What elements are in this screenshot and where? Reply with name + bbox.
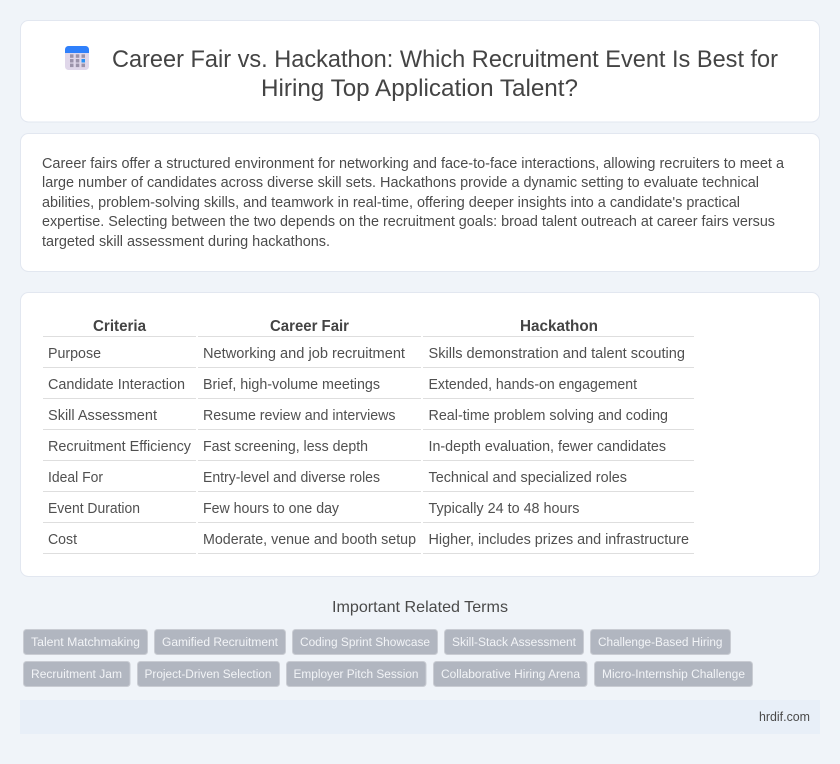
table row: Cost: [43, 532, 694, 554]
tag: Skill-Stack Assessment: [444, 630, 584, 654]
tag: Gamified Recruitment: [154, 630, 286, 654]
table row: Purpose: Skills demonstration and talent scouting: [428, 346, 685, 362]
tag: Employer Pitch Session: Employer Pitch Session: [294, 667, 419, 681]
table row: Event Duration: [43, 501, 694, 523]
tag: Challenge-Based Hiring: Challenge-Based Hiring: [598, 635, 723, 649]
table row: Skill Assessment: Skill Assessment: [48, 408, 157, 424]
text block: introduction paragraph: targeted skill assessment during hackathons.: [42, 234, 330, 250]
tag: Recruitment Jam: Recruitment Jam: [31, 667, 122, 681]
tag: Coding Sprint Showcase: [292, 630, 438, 654]
tag: Challenge-Based Hiring: [590, 630, 730, 654]
panel: comparison table: [20, 292, 820, 576]
table row: Candidate Interaction: Candidate Interaction: [48, 377, 185, 393]
tag: Employer Pitch Session: [286, 662, 426, 686]
table row: Recruitment Efficiency: Fast screening, less depth: [203, 439, 368, 455]
panel: title header: [20, 20, 820, 122]
tag: Recruitment Jam: [24, 662, 130, 686]
table row: Cost: Higher, includes prizes and infrastructure: [428, 532, 689, 548]
icon: calendar: [65, 46, 89, 70]
text block: introduction paragraph: [42, 156, 784, 250]
tag: Coding Sprint Showcase: Coding Sprint Showcase: [300, 635, 430, 649]
table row: Candidate Interaction: Extended, hands-on engagement: [428, 377, 637, 393]
table row: Skill Assessment: [43, 408, 694, 430]
table row: Cost: Moderate, venue and booth setup: [203, 532, 416, 548]
tag: Collaborative Hiring Arena: Collaborative Hiring Arena: [441, 667, 580, 681]
table row: Skill Assessment: Real-time problem solving and coding: [428, 408, 668, 424]
text block: introduction paragraph: expertise. Selecting between the two depends on the recruitment goals: broad talent outreach at career fairs versus: [42, 214, 775, 230]
table header row: [43, 318, 694, 337]
tag: Project-Driven Selection: [138, 662, 280, 686]
tag: Project-Driven Selection: Project-Driven Selection: [144, 667, 272, 681]
table row: Event Duration: Typically 24 to 48 hours: [428, 501, 580, 517]
table row: Event Duration: Event Duration: [48, 501, 140, 517]
tag: Micro-Internship Challenge: [594, 662, 752, 686]
tag: Gamified Recruitment: Gamified Recruitment: [162, 635, 279, 649]
tag: Micro-Internship Challenge: Micro-Internship Challenge: [602, 667, 745, 681]
table header row: Career Fair: [270, 318, 349, 335]
table row: Recruitment Efficiency: [43, 439, 694, 461]
table row: Candidate Interaction: [43, 377, 694, 399]
table header row: Criteria: [93, 318, 146, 335]
tag: Talent Matchmaking: Talent Matchmaking: [31, 635, 140, 649]
table row: Ideal For: Entry-level and diverse roles: [203, 470, 380, 486]
tag group: related terms: [24, 630, 752, 686]
text block: introduction paragraph: large number of candidates across diverse skill sets. Hackathons provide a dynamic setting to evaluate technical: [42, 175, 759, 191]
title: Hiring Top Application Talent?: [261, 75, 578, 102]
footer bar: [20, 700, 820, 734]
table row: Event Duration: Few hours to one day: [203, 501, 340, 517]
table row: Purpose: [43, 346, 694, 368]
tag: Collaborative Hiring Arena: [434, 662, 587, 686]
tag: Talent Matchmaking: [24, 630, 148, 654]
text block: introduction paragraph: abilities, problem-solving skills, and teamwork in real-time, offering deeper insights into a candidate's practical: [42, 195, 740, 211]
table header row: Hackathon: [520, 318, 598, 335]
footer bar: hrdif.com: [759, 709, 810, 724]
table row: Ideal For: [43, 470, 694, 492]
text block: introduction paragraph: Career fairs offer a structured environment for networking and face-to-face interactions, allowing recruiters to meet a: [42, 156, 784, 172]
table row: Recruitment Efficiency: Recruitment Efficiency: [48, 439, 192, 455]
table row: Cost: Cost: [48, 532, 77, 548]
table row: Recruitment Efficiency: In-depth evaluation, fewer candidates: [428, 439, 666, 455]
heading: Important Related Terms: Important Related Terms: [332, 599, 508, 616]
table row: Ideal For: Technical and specialized roles: [428, 470, 627, 486]
table row: Purpose: Networking and job recruitment: [203, 346, 405, 362]
tag: Skill-Stack Assessment: Skill-Stack Assessment: [452, 635, 577, 649]
table row: Purpose: Purpose: [48, 346, 101, 362]
panel: introduction: [20, 134, 820, 272]
table row: Skill Assessment: Resume review and interviews: [203, 408, 396, 424]
table row: Candidate Interaction: Brief, high-volume meetings: [203, 377, 380, 393]
table row: Ideal For: Ideal For: [48, 470, 103, 486]
title: [112, 46, 778, 102]
title: Career Fair vs. Hackathon: Which Recruitment Event Is Best for: [112, 46, 778, 73]
